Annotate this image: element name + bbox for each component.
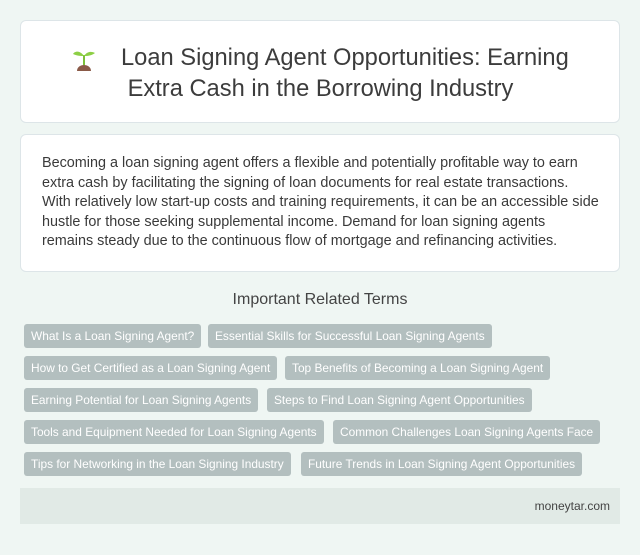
title: Extra Cash in the Borrowing Industry: [128, 76, 513, 102]
title: [121, 45, 569, 102]
section heading: Important Related Terms: [233, 291, 407, 308]
description text: extra cash by facilitating the signing of loan documents for real estate transactions.: [42, 174, 568, 190]
description text: Becoming a loan signing agent offers a flexible and potentially profitable way to earn: [42, 155, 578, 171]
tags: Tips for Networking in the Loan Signing Industry: [31, 457, 284, 471]
tags: Top Benefits of Becoming a Loan Signing Agent: [292, 361, 543, 375]
footer text: moneytar.com: [535, 499, 610, 513]
description text: remains steady due to the continuous flow of mortgage and refinancing activities.: [42, 233, 557, 249]
description text: With relatively low start-up costs and training requirements, it can be an accessible side: [42, 194, 599, 210]
tags: Earning Potential for Loan Signing Agents: [31, 393, 251, 407]
header card: [20, 20, 620, 123]
tags: Steps to Find Loan Signing Agent Opportunities: [274, 393, 525, 407]
tags: How to Get Certified as a Loan Signing Agent: [31, 361, 270, 375]
description card: [20, 134, 620, 272]
footer: [20, 488, 620, 524]
icon: sprout: [73, 52, 95, 71]
description text: [42, 155, 599, 249]
description text: hustle for those seeking supplemental income. Demand for loan signing agents: [42, 214, 545, 230]
tags: Essential Skills for Successful Loan Signing Agents: [215, 329, 485, 343]
tags: What Is a Loan Signing Agent?: [31, 329, 194, 343]
tags: Common Challenges Loan Signing Agents Face: [340, 425, 593, 439]
tags: Future Trends in Loan Signing Agent Opportunities: [308, 457, 575, 471]
tags: Tools and Equipment Needed for Loan Signing Agents: [31, 425, 317, 439]
title: Loan Signing Agent Opportunities: Earning: [121, 45, 569, 71]
